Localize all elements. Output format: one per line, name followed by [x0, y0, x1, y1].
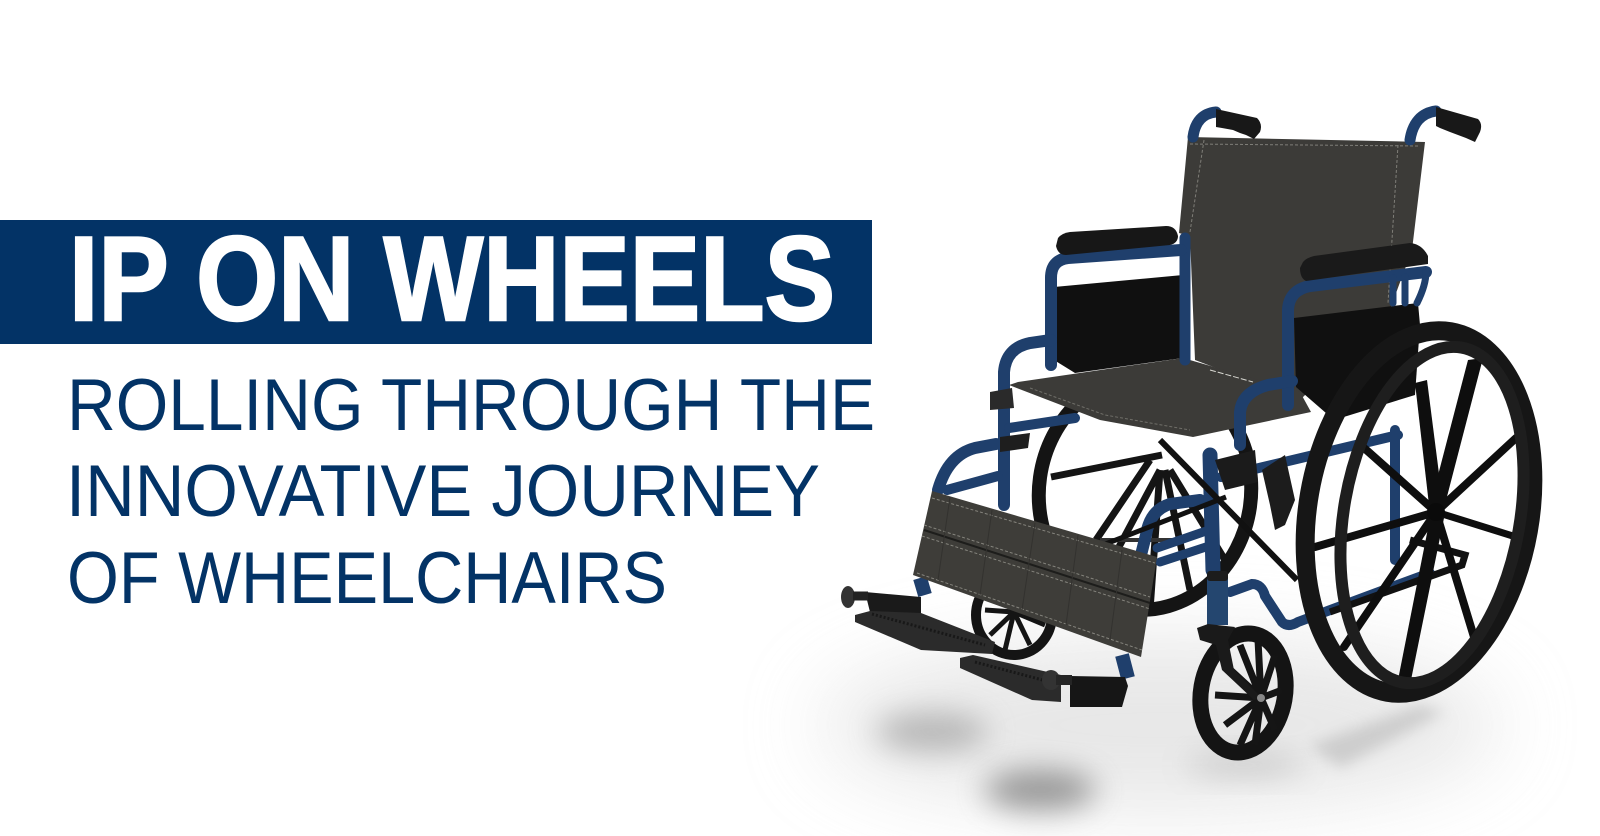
left grip [1216, 109, 1261, 139]
left side panel [1054, 275, 1183, 373]
wedge spokes [1398, 358, 1483, 680]
left armrest [1056, 226, 1178, 255]
floor shadow [820, 640, 1500, 810]
near rear wheel [1278, 313, 1560, 711]
cross brace [1103, 440, 1465, 612]
hub [1427, 503, 1445, 521]
far rear wheel [1024, 360, 1266, 624]
wheelchair [841, 107, 1560, 759]
leg strap [913, 491, 1157, 657]
subtitle [66, 365, 875, 619]
right armrest [1300, 243, 1428, 281]
right grip [1436, 107, 1481, 142]
right side panel [1294, 303, 1420, 420]
right footrest [960, 655, 1128, 707]
subtitle: INNOVATIVE JOURNEY [66, 451, 820, 532]
handrim [1316, 332, 1548, 698]
seat stitching [1030, 388, 1190, 430]
seat [1009, 358, 1311, 437]
title banner: IP ON WHEELS [69, 212, 835, 346]
subtitle: OF WHEELCHAIRS [67, 538, 667, 619]
centre post lower [1207, 578, 1228, 625]
wheel lock [1215, 450, 1258, 490]
tyre [1278, 313, 1560, 711]
spokes [1315, 438, 1516, 647]
right leg tube [1122, 655, 1128, 678]
seat crease highlight [1210, 370, 1253, 382]
backrest stitching [1190, 140, 1420, 303]
brake lever [1262, 455, 1295, 530]
foot clamp [1000, 433, 1030, 452]
seat clamp left [990, 388, 1014, 410]
left leg tube [920, 578, 925, 595]
blue frame [938, 111, 1436, 625]
centre post cap [1207, 571, 1228, 581]
near caster wheel [1191, 624, 1295, 759]
backrest [1179, 137, 1425, 400]
subtitle: ROLLING THROUGH THE [67, 365, 875, 446]
far caster wheel [976, 575, 1052, 655]
left footrest [841, 586, 995, 654]
